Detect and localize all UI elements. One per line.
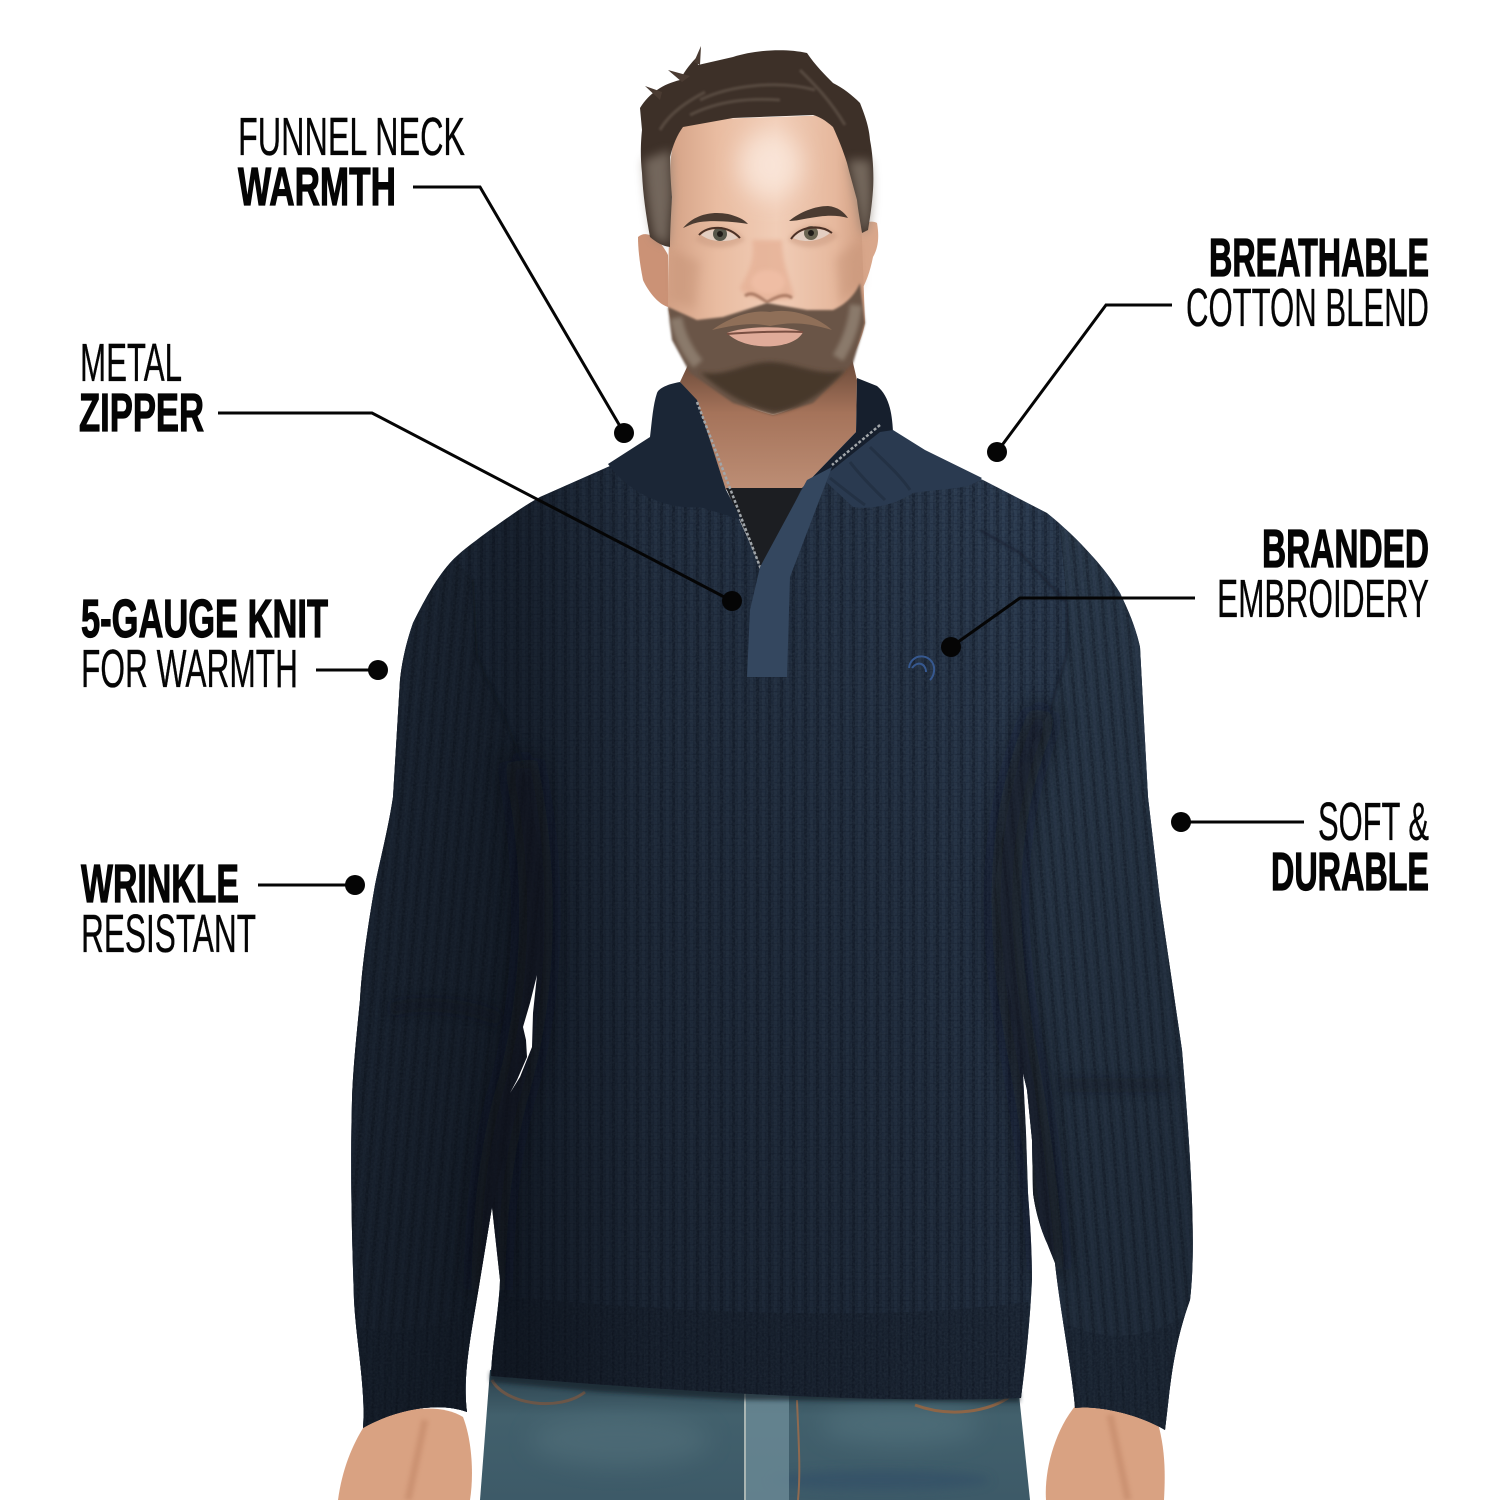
- eye sockets: [695, 225, 838, 248]
- leader line and dot: zipper: [218, 413, 742, 611]
- funnel collar right: [800, 378, 982, 508]
- metal zipper teeth: [697, 402, 880, 572]
- cheek shading: [672, 240, 862, 310]
- callout: 5-gauge knit: [81, 589, 388, 699]
- text: 5-gauge knit: 5-GAUGE KNIT: [81, 589, 328, 649]
- text: wrinkle resistant: WRINKLE: [81, 854, 239, 914]
- fold shadows: [488, 760, 536, 1290]
- lighting overlays: [351, 466, 884, 1428]
- text: branded embroidery: [1217, 519, 1429, 629]
- text: metal zipper: [79, 333, 204, 443]
- leader line and dot: knit: [316, 660, 388, 680]
- leader line and dot: wrinkle: [258, 875, 365, 895]
- callout: funnel neck warmth: [238, 107, 634, 443]
- hair: [640, 46, 873, 247]
- hair tufts: [645, 46, 701, 100]
- ears: [638, 234, 668, 307]
- left cuff: [356, 1302, 476, 1428]
- leader line and dot: breathable: [987, 305, 1172, 462]
- text: funnel neck warmth: WARMTH: [238, 157, 396, 217]
- neck: [680, 350, 857, 490]
- text: breathable cotton blend: [1186, 228, 1429, 338]
- text: wrinkle resistant: RESISTANT: [81, 904, 256, 964]
- funnel collar left: [608, 382, 742, 520]
- hair highlights: [660, 70, 845, 130]
- text: 5-gauge knit: [81, 589, 328, 699]
- text: 5-gauge knit: FOR WARMTH: [81, 639, 298, 699]
- right cuff: [1063, 1316, 1185, 1430]
- callout: soft and durable: [1171, 792, 1429, 902]
- embroidered logo: [909, 656, 934, 680]
- beard: [668, 283, 865, 415]
- callout: wrinkle resistant: [81, 854, 365, 964]
- grey temples: [644, 150, 672, 245]
- sweater with sleeves: [351, 466, 1193, 1430]
- hem ribbing: [491, 1296, 1031, 1400]
- callout: breathable cotton blend: [987, 228, 1429, 462]
- brows: [683, 213, 748, 228]
- text: wrinkle resistant: [81, 854, 256, 964]
- text: funnel neck warmth: [238, 107, 465, 217]
- raglan seams: [472, 580, 512, 734]
- callout: metal zipper: [79, 333, 742, 611]
- face: [668, 115, 865, 415]
- right sleeve: [996, 529, 1193, 1430]
- eyes: [701, 229, 738, 241]
- text: soft and durable: [1271, 792, 1429, 902]
- head: [638, 46, 878, 415]
- leader line and dot: soft: [1171, 812, 1304, 832]
- undershirt: [726, 488, 802, 570]
- jeans: [480, 1370, 1030, 1500]
- arm gap sliver: [510, 975, 537, 1093]
- photo: man wearing navy sweater: [338, 46, 1250, 1500]
- leader line and dot: embroidery: [941, 598, 1195, 657]
- text: funnel neck warmth: FUNNEL NECK: [238, 107, 465, 167]
- callout: branded embroidery: [941, 519, 1429, 657]
- left sleeve: [351, 558, 513, 1428]
- leader line and dot: funnel neck: [413, 187, 634, 443]
- forehead highlight: [738, 131, 802, 199]
- knit noise: [340, 430, 1210, 1440]
- text: metal zipper: ZIPPER: [79, 383, 204, 443]
- hands: [338, 1404, 1165, 1500]
- zipper placket: [747, 467, 832, 677]
- nose: [740, 240, 794, 300]
- text: metal zipper: METAL: [80, 333, 182, 393]
- lips: [727, 327, 803, 346]
